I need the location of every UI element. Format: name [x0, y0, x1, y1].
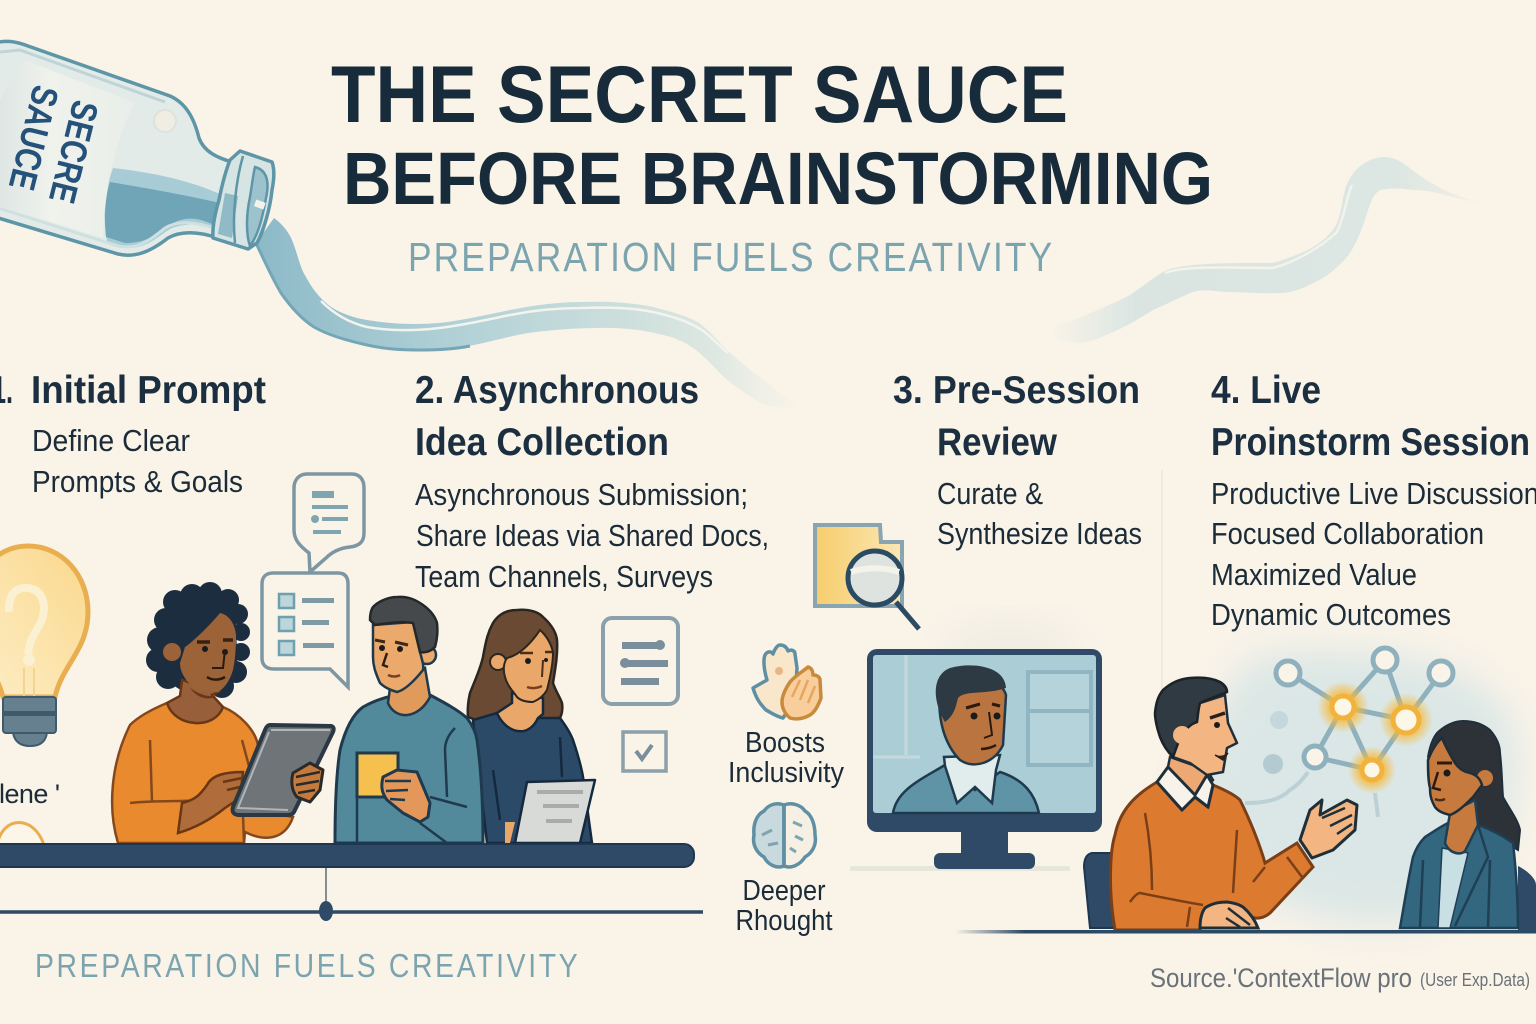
benefit: deeper thought: Deeper	[742, 875, 826, 907]
monitor with video-call participant	[850, 649, 1102, 871]
title	[331, 50, 1213, 220]
floor line	[955, 930, 1536, 934]
person: woman in blue blazer	[1400, 721, 1536, 932]
step 1 text	[0, 369, 266, 499]
speech bubble: top	[294, 474, 364, 572]
benefit: boosts inclusivity: Boosts	[745, 727, 825, 759]
icon: settings card	[603, 618, 678, 704]
bottle label text: SECRE	[41, 96, 106, 207]
icon: secret sauce bottle	[0, 41, 274, 255]
person: man in teal with sticky note	[335, 597, 483, 843]
step 3 text: Review	[937, 421, 1058, 464]
icon: light bulb	[0, 546, 88, 746]
icon: clasped hands	[753, 645, 821, 719]
chair	[1084, 853, 1125, 928]
benefit: deeper thought: Rhought	[736, 905, 832, 937]
step 4 text: Focused Collaboration	[1211, 516, 1484, 551]
step 1 text: Prompts & Goals	[32, 464, 243, 499]
step 3 text	[893, 369, 1142, 551]
step 2 text	[415, 369, 769, 594]
subtitle: PREPARATION FUELS CREATIVITY	[408, 235, 1052, 281]
icon: check box	[623, 732, 666, 771]
benefit: boosts inclusivity: Inclusivity	[728, 757, 844, 789]
small arc icon	[0, 822, 44, 845]
icon: folder with magnifier	[815, 525, 919, 629]
icon: brain	[754, 804, 815, 867]
step 2 text: Asynchronous Submission;	[415, 477, 748, 512]
source note: Source.'ContextFlow pro	[1150, 963, 1412, 993]
step 2 text: Share Ideas via Shared Docs,	[416, 518, 769, 553]
title: THE SECRET SAUCE	[331, 50, 1068, 140]
step 2 text: Idea Collection	[415, 421, 669, 464]
sauce stream ribbon, left part	[256, 218, 796, 408]
soft background blob behind monitor	[945, 622, 1075, 678]
divider between steps 3 and 4	[1161, 470, 1163, 700]
step 4 text: Maximized Value	[1211, 557, 1417, 592]
benefit: boosts inclusivity	[728, 645, 844, 789]
step 3 text: Curate &	[937, 476, 1043, 511]
step 3 text: Synthesize Ideas	[937, 516, 1142, 551]
step 2 text: Team Channels, Surveys	[415, 559, 713, 594]
step 1 text: Initial Prompt	[31, 369, 266, 412]
title: BEFORE BRAINSTORMING	[343, 137, 1213, 220]
timeline	[0, 868, 703, 921]
table bar	[0, 844, 694, 867]
step 4 text: 4. Live	[1211, 369, 1321, 412]
step 4 text: Dynamic Outcomes	[1211, 597, 1451, 632]
sauce stream ribbon, right part	[1053, 157, 1480, 343]
person: woman in orange with tablet	[112, 582, 334, 843]
speech bubble: checklist	[262, 573, 348, 687]
soft background blob behind network	[1188, 651, 1516, 925]
partial label: lene '	[0, 779, 60, 809]
benefit: deeper thought	[736, 804, 832, 937]
footer tagline: PREPARATION FUELS CREATIVITY	[35, 947, 578, 985]
bottle label text	[1, 81, 106, 207]
network diagram	[1245, 648, 1453, 817]
step 3 text: 3. Pre-Session	[893, 369, 1140, 412]
step 2 text: 2. Asynchronous	[415, 369, 699, 412]
step 4 text	[1211, 369, 1536, 632]
person: presenter in orange sweater	[1110, 678, 1357, 930]
person: woman in navy with laptop	[468, 610, 595, 843]
step 1 text: Define Clear	[32, 423, 190, 458]
